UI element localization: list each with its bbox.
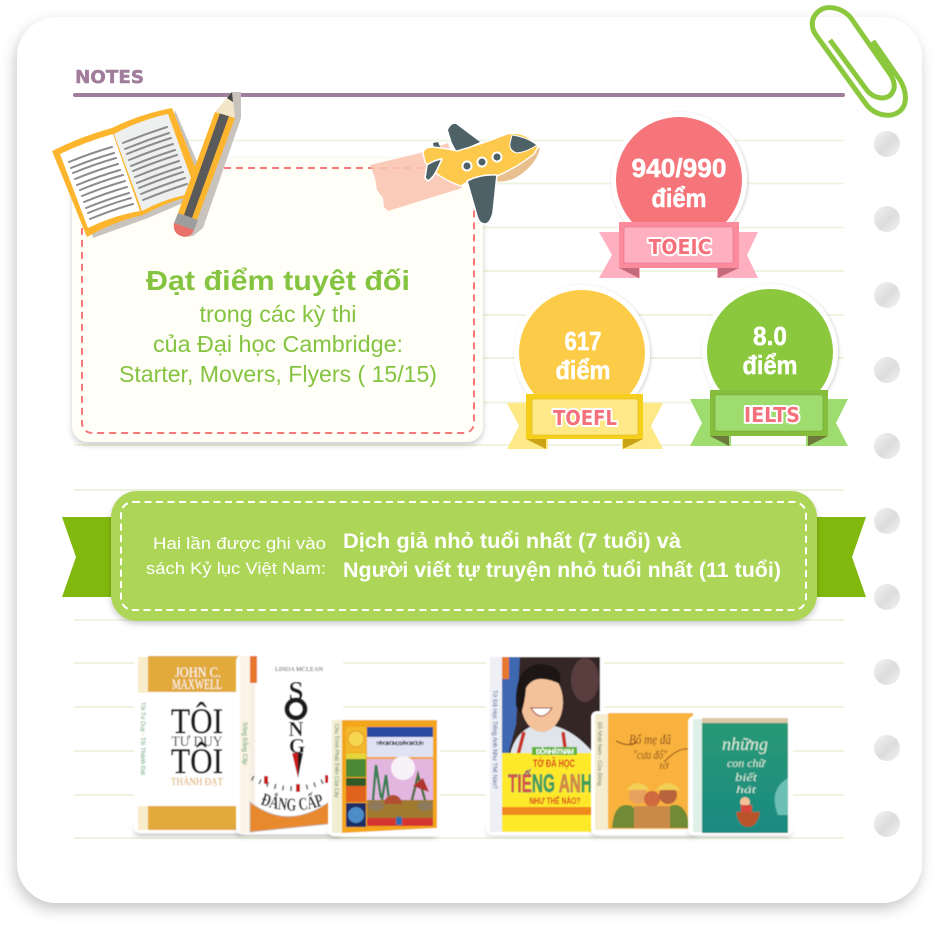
book: Tôi tư duy tôi thành đạt: TƯ DUY: [172, 734, 223, 750]
book: Tôi tư duy tôi thành đạt: JOHN C.: [175, 665, 221, 681]
book: Sống đẳng cấp: [234, 655, 344, 840]
score: 8.0: [753, 321, 787, 351]
icon: pencil: [174, 92, 241, 237]
dashed border: [82, 168, 474, 433]
book: Tớ đã học tiếng Anh như thế nào: ĐỖ NHẬT NAM: [536, 747, 574, 756]
book: Sống đẳng cấp: ĐẲNG CẤP: [260, 791, 323, 812]
card line 2: của Đại học Cambridge:: [153, 331, 403, 357]
book: Sống đẳng cấp: G: [289, 734, 305, 758]
book: Bố mẹ đã cưa đổ tớ: "cưa đổ": [633, 747, 667, 762]
banner dashed border: [121, 502, 806, 610]
badge: TOEFL: [507, 285, 663, 449]
book: Tớ đã học tiếng Anh như thế nào: [486, 655, 604, 835]
badge: TOEIC: [599, 112, 758, 278]
book: Tôi tư duy tôi thành đạt: MAXWELL: [172, 677, 222, 693]
book: Tôi tư duy tôi thành đạt: THÀNH ĐẠT: [171, 776, 223, 788]
banner body: [111, 491, 817, 621]
book: Tớ đã học tiếng Anh như thế nào: TỚ ĐÃ HỌC: [533, 757, 575, 770]
ribbon: IELTS: [744, 403, 800, 427]
score: 940/990: [632, 153, 726, 183]
binder holes: [874, 131, 900, 837]
book: Nắng trời mọc nắng trời lặn: [328, 718, 440, 837]
book: Bố mẹ đã cưa đổ tớ: Đỗ Nhật Nam - Cửa Đồng: [596, 722, 603, 786]
record intro line 2: sách Kỷ lục Việt Nam:: [146, 559, 326, 578]
heading: notes: NOTES: [75, 67, 144, 88]
ribbon: TOEIC: [648, 235, 712, 259]
panel: cambridge score card: [72, 158, 483, 442]
card line 3: Starter, Movers, Flyers ( 15/15): [119, 361, 437, 387]
book: Những con chữ biết hát: những: [722, 734, 768, 754]
ribbon: [507, 394, 663, 449]
book: Bố mẹ đã cưa đổ tớ: tớ: [660, 760, 670, 772]
record line 2: Người viết tự truyện nhỏ tuổi nhất (11 tuổi): [343, 559, 781, 582]
book: Tôi tư duy tôi thành đạt: TÔI: [171, 701, 223, 741]
record intro line 1: Hai lần được ghi vào: [153, 534, 326, 553]
card title: Đạt điểm tuyệt đối: [146, 265, 410, 296]
ribbon: [599, 222, 758, 278]
book: Bố mẹ đã cưa đổ tớ: [591, 711, 699, 836]
right ribbon tail: [813, 517, 866, 597]
icon: open book: [52, 108, 198, 238]
book: Những con chữ biết hát: con chữ: [727, 756, 766, 770]
icon: paperclip: [812, 8, 905, 115]
book: Nắng trời mọc nắng trời lặn: NẮNG TRỜI MỌC, NẮNG TRỜI LẶN: [376, 739, 424, 747]
book: Bố mẹ đã cưa đổ tớ: Bố mẹ đã: [629, 733, 671, 748]
ribbon: TOEFL: [553, 406, 617, 430]
book: Tôi tư duy tôi thành đạt: Tôi Tư Duy - Tôi Thành Đạt: [139, 702, 145, 775]
unit: điểm: [652, 183, 706, 213]
card line 1: trong các kỳ thi: [200, 301, 356, 327]
badge: IELTS: [690, 284, 848, 446]
book: Tớ đã học tiếng Anh như thế nào: TIẾNG ANH: [508, 769, 592, 798]
left ribbon tail: [62, 517, 115, 597]
book: Sống đẳng cấp: S: [288, 676, 304, 706]
unit: điểm: [742, 350, 798, 380]
book: Sống đẳng cấp: Sống Đẳng Cấp: [241, 722, 248, 765]
book: Sống đẳng cấp: N: [288, 717, 304, 741]
record line 1: Dịch giả nhỏ tuổi nhất (7 tuổi) và: [343, 530, 681, 553]
book: Những con chữ biết hát: [688, 716, 793, 836]
icon: airplane: [423, 124, 540, 224]
score: 617: [564, 326, 602, 356]
book: Những con chữ biết hát: hát: [736, 784, 757, 796]
icon: washi tape: [370, 143, 462, 211]
ribbon: [690, 390, 848, 446]
book: Nắng trời mọc nắng trời lặn: Chu Trình Phát Triển Của Cây: [333, 724, 340, 798]
unit: điểm: [556, 355, 610, 385]
book: Sống đẳng cấp: LINDA MCLEAN: [275, 666, 323, 673]
book: Tớ đã học tiếng Anh như thế nào: NHƯ THẾ NÀO?: [530, 796, 580, 806]
book: Tôi tư duy tôi thành đạt: TÔI: [171, 741, 223, 781]
book: Tớ đã học tiếng Anh như thế nào: Tớ Đã Học Tiếng Anh Như Thế Nào?: [491, 690, 497, 790]
book: Những con chữ biết hát: biết: [735, 770, 758, 784]
book: Tôi tư duy tôi thành đạt: [134, 655, 246, 835]
heading rule: [73, 93, 845, 97]
panel: vietnam record banner: [62, 491, 866, 621]
